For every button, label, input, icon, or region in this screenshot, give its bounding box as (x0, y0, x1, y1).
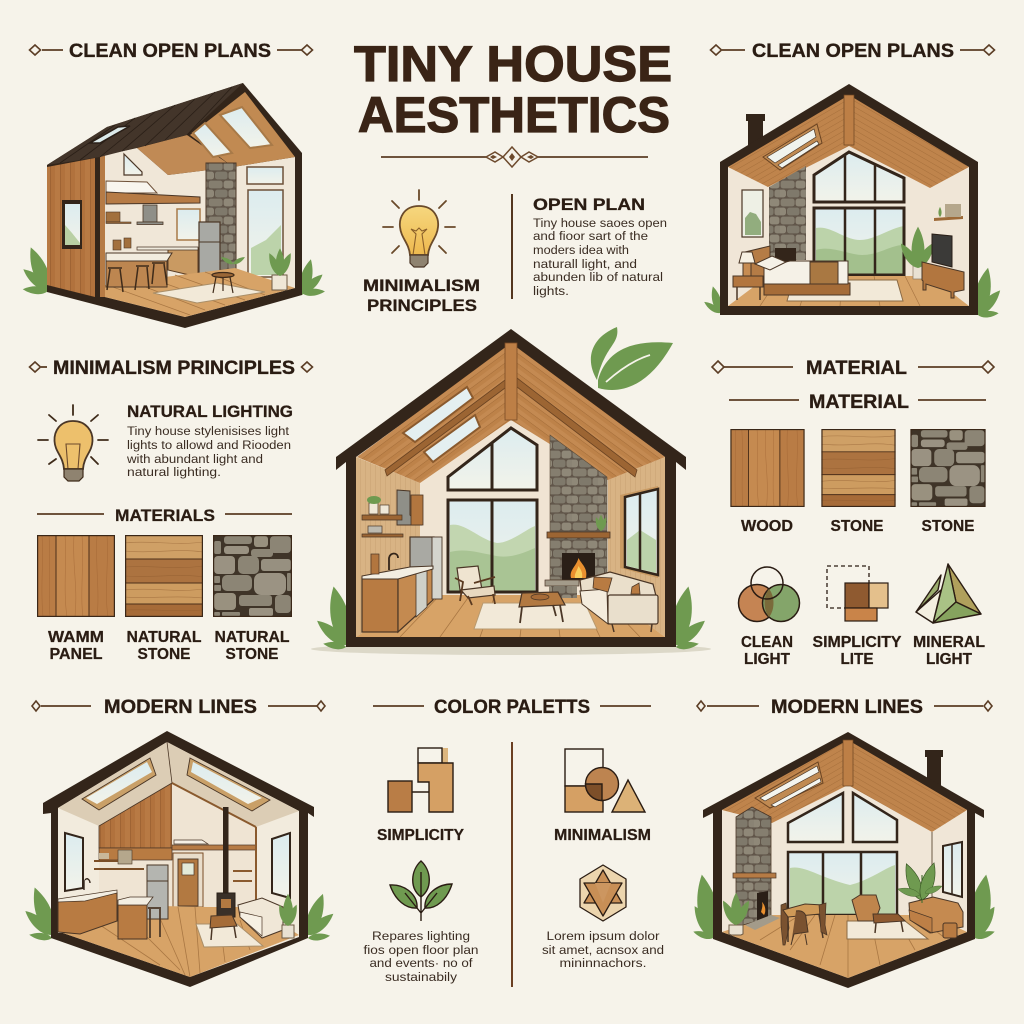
icon: plant sprout (390, 861, 452, 921)
heading: material first: MATERIAL (806, 357, 907, 379)
armchair (455, 566, 495, 605)
swatch labels: left: NATURAL (126, 629, 202, 646)
heading: clean open plans right: CLEAN OPEN PLANS (752, 40, 954, 62)
skylight (755, 762, 823, 808)
framed art (742, 190, 763, 237)
swatch labels: right (741, 518, 974, 535)
faucet and board (371, 554, 398, 574)
text block: lorem (542, 929, 664, 970)
coffee table (210, 915, 237, 940)
stool table (212, 272, 234, 293)
walls (722, 742, 967, 978)
kitchen shelves (94, 853, 144, 870)
range hood (137, 205, 163, 224)
fridge (199, 222, 220, 281)
ceiling (357, 343, 665, 483)
ground shadow (311, 643, 711, 655)
title: TINY HOUSE (354, 36, 672, 92)
house: isometric kitchen cutaway (20, 83, 325, 328)
house: dining living cutaway (690, 732, 999, 988)
stone chimney column (206, 163, 236, 273)
upper cabinets (99, 848, 172, 864)
label: MINIMALISM (363, 276, 480, 295)
swatch labels: right: STONE (922, 518, 974, 535)
icon labels: right: CLEAN (741, 634, 793, 651)
rug (196, 924, 263, 947)
skylights (82, 758, 270, 811)
stone wall (769, 166, 806, 260)
text block: open plan: naturall light, and (533, 257, 637, 271)
coffee table (873, 914, 905, 933)
floor (356, 595, 665, 637)
left plant (719, 893, 753, 935)
side leaves (313, 585, 709, 651)
kitchen cabinets (58, 879, 117, 934)
island (118, 897, 161, 939)
floor (105, 268, 295, 317)
swatch: stone (910, 429, 986, 507)
text block: open plan: abunden lib of natural (533, 270, 663, 284)
corner post (100, 155, 106, 297)
wood accent wall (99, 783, 172, 848)
icon: simplicity shapes (388, 748, 453, 812)
left window (65, 833, 83, 891)
swatch: natural stone (213, 535, 292, 617)
label: minimalism: MINIMALISM (554, 827, 651, 844)
text block: natural lighting: Tiny house stylenisises light (127, 424, 290, 438)
title (354, 36, 672, 143)
text block: sustainability: and events· no of (370, 956, 473, 970)
stone chimney wall (550, 435, 607, 580)
swatch labels: left: NATURAL (214, 629, 290, 646)
chimney (925, 750, 943, 787)
shell (720, 84, 978, 315)
fireplace (775, 248, 796, 262)
icon labels: right: SIMPLICITY (812, 634, 902, 651)
heading: modern lines right (697, 696, 992, 718)
house shell (47, 83, 302, 328)
armchair (852, 895, 880, 921)
walls (58, 742, 299, 977)
floor (722, 915, 967, 978)
label (363, 276, 480, 315)
upper window (448, 428, 537, 490)
walls (728, 100, 969, 306)
swatch labels: left (48, 629, 290, 663)
swatch labels: left: STONE (138, 646, 190, 663)
heading: materials: MATERIALS (115, 506, 215, 525)
corner line (931, 832, 933, 898)
text block: sustainability: Repares lighting (372, 929, 470, 943)
icon: overlapping circles (738, 567, 800, 622)
text block: open plan: OPEN PLAN (533, 195, 645, 214)
nightstand and lamp (733, 252, 763, 300)
shelves (362, 496, 403, 537)
ceiling (728, 95, 969, 188)
text block: natural lighting: with abundant light and (126, 452, 263, 466)
lower window (814, 208, 904, 275)
swatches: left materials (37, 535, 292, 617)
interior walls (105, 148, 295, 317)
swatch: natural wood (125, 535, 203, 617)
stone chimney (733, 807, 776, 927)
stools (107, 263, 167, 292)
icon: light bulb (38, 405, 108, 481)
text block: sustainability: sustainabily (385, 970, 458, 984)
floor (63, 905, 299, 977)
side leaves (22, 885, 337, 942)
left wall (356, 457, 420, 637)
heading: modern lines right: MODERN LINES (771, 696, 923, 718)
text block: lorem: mininnachors. (560, 956, 646, 970)
text block: open plan (533, 195, 667, 298)
heading: material second: MATERIAL (809, 391, 909, 413)
heading: color palette: COLOR PALETTS (434, 696, 590, 718)
divider (511, 742, 513, 987)
right window (272, 833, 290, 898)
kitchen cabinets (362, 568, 433, 632)
island (106, 253, 172, 287)
ceiling (137, 135, 233, 175)
icon: minimalism shapes (565, 749, 645, 812)
loft and shelf (106, 181, 200, 204)
swatch labels: right: STONE (830, 518, 884, 535)
small gable window (124, 154, 142, 175)
lower window (448, 500, 537, 592)
kitchen cabinets (137, 247, 198, 277)
heading: modern lines left: MODERN LINES (104, 696, 257, 718)
range hood (397, 490, 423, 525)
lower window (788, 852, 897, 915)
icon labels: right: LIGHT (926, 651, 973, 668)
icon labels: right (741, 634, 985, 668)
shell (336, 329, 686, 647)
text block: lorem: sit amet, acnsox and (542, 943, 664, 957)
swatch labels: right: WOOD (741, 518, 793, 535)
icon: pyramid (916, 564, 981, 623)
title ornament (381, 147, 648, 167)
icon: leaf (591, 327, 673, 390)
shell (43, 731, 314, 987)
skylight (763, 124, 822, 170)
dining table (781, 903, 827, 945)
rug (787, 280, 903, 301)
swatch: wood (730, 429, 805, 507)
shell (703, 732, 984, 988)
upper windows (788, 793, 897, 842)
title: AESTHETICS (358, 87, 670, 143)
heading: modern lines left (32, 696, 325, 718)
swatch labels: left: PANEL (50, 646, 102, 663)
kitchen shelf items (106, 212, 131, 250)
swatch labels: left: STONE (226, 646, 278, 663)
sofa (580, 572, 658, 632)
side leaves (702, 266, 1004, 318)
tall plant (897, 861, 943, 903)
wall shelf (934, 204, 963, 221)
ceiling (58, 742, 299, 827)
rug (474, 603, 597, 629)
swatches: right materials (730, 429, 986, 507)
rug (153, 283, 265, 303)
right wall (608, 457, 665, 637)
side leaves (20, 245, 325, 297)
heading: material first (712, 357, 994, 379)
bed (745, 246, 850, 295)
rug (847, 921, 928, 939)
fridge (410, 537, 442, 599)
text block: open plan: and fioor sart of the (533, 229, 648, 243)
house: central living room cutaway (311, 329, 711, 655)
exterior window (62, 200, 82, 249)
heading: minimalism principles: MINIMALISM PRINCIPLES (53, 357, 295, 379)
exterior wood siding (47, 158, 95, 297)
heading: clean open plans left: CLEAN OPEN PLANS (69, 40, 271, 62)
coffee table (519, 592, 565, 623)
fridge (147, 865, 168, 919)
label: simplicity: SIMPLICITY (377, 827, 465, 844)
tv and console (922, 234, 964, 298)
house: open kitchen cutaway (22, 731, 337, 987)
text block: open plan: Tiny house saoes open (533, 216, 667, 230)
icon: light bulb (383, 190, 455, 267)
icon: overlapping squares (827, 566, 888, 621)
upper window (814, 152, 904, 202)
back wall (99, 783, 256, 907)
swatch: stone wood (821, 429, 896, 507)
gable wood (190, 92, 295, 167)
side window (620, 486, 658, 578)
section: minimalism principles callout (363, 190, 480, 315)
hearth (745, 915, 780, 930)
house: bedroom cutaway (702, 84, 1004, 318)
skylights (193, 107, 272, 157)
icon labels: right: LITE (840, 651, 874, 668)
loft (172, 783, 256, 907)
chimney (746, 114, 765, 148)
text block: sustainability: fios open floor plan (364, 943, 478, 957)
swatch labels: left: WAMM (48, 629, 104, 646)
text block: open plan: moders idea with (533, 243, 629, 257)
text block: natural lighting: lights to allowd and Riooden (127, 438, 291, 452)
mantel plant (594, 514, 608, 532)
text block: open plan: lights. (533, 284, 569, 298)
side leaves (690, 873, 999, 941)
plant (276, 894, 300, 938)
swatch: warm panel (37, 535, 115, 617)
icon: geometric hexagon (580, 865, 626, 921)
icon labels: right: LIGHT (744, 651, 791, 668)
stove with pipe (217, 807, 235, 917)
text block: natural lighting (126, 402, 293, 479)
right wall window (943, 842, 962, 897)
skylights (403, 387, 480, 462)
kitchen window (177, 209, 200, 240)
icon labels: right: MINERAL (913, 634, 985, 651)
sofa (909, 897, 963, 938)
text block: natural lighting: NATURAL LIGHTING (127, 402, 293, 421)
plant (897, 227, 938, 279)
fireplace (545, 532, 610, 598)
counter (362, 566, 433, 579)
ceiling (722, 740, 967, 832)
back wall (356, 345, 665, 637)
floor (728, 276, 969, 306)
potted plants (220, 248, 294, 290)
text block: natural lighting: natural lighting. (127, 465, 221, 479)
sofa (238, 898, 283, 938)
label: PRINCIPLES (367, 296, 477, 315)
roof (47, 83, 243, 165)
text block: sustainability (364, 929, 478, 984)
right windows (247, 167, 283, 277)
divider (511, 194, 513, 299)
door (173, 853, 203, 907)
text block: lorem: Lorem ipsum dolor (546, 929, 660, 943)
